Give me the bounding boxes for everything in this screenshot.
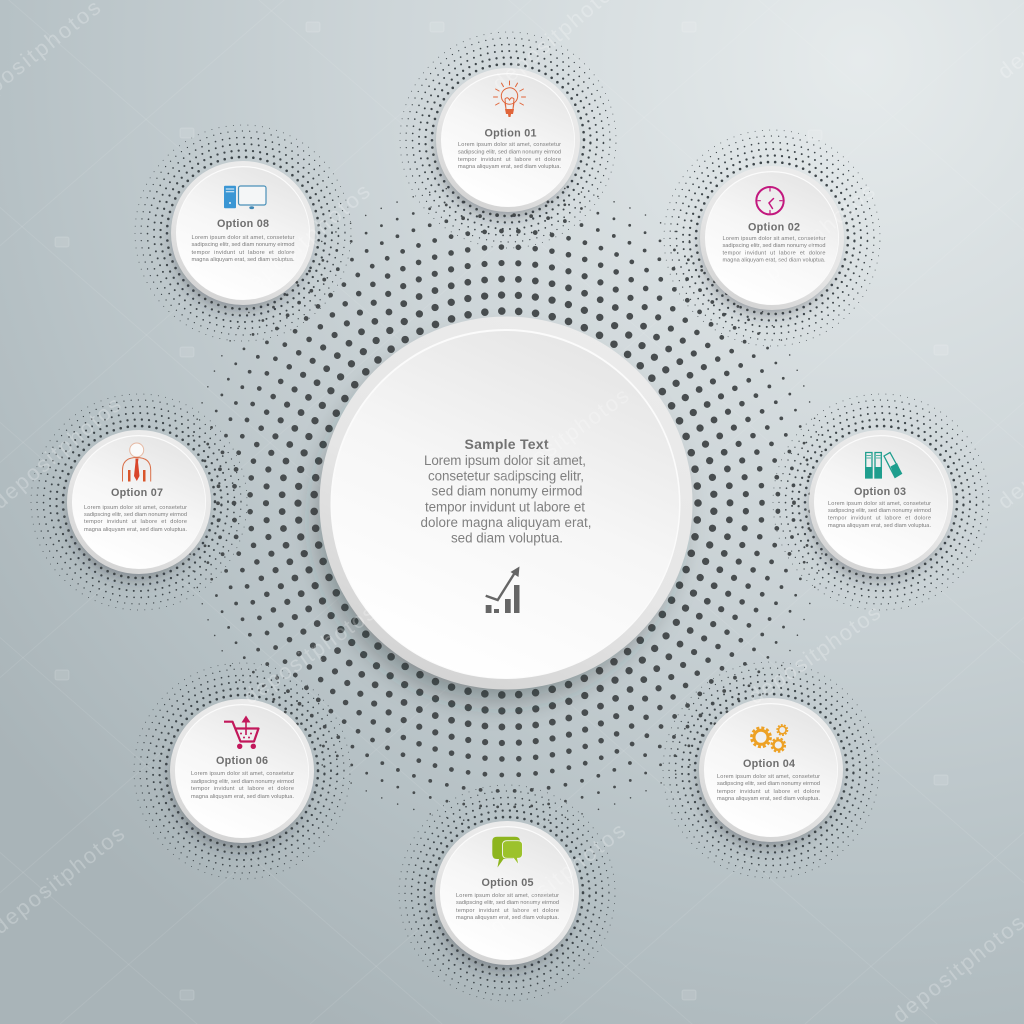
central title: Sample Text bbox=[464, 436, 549, 452]
central shadow bbox=[318, 340, 678, 700]
disc 04 bbox=[699, 698, 843, 847]
text block 04: tempor invidunt ut labore et dolore bbox=[717, 789, 820, 795]
central text block: Lorem ipsum dolor sit amet, bbox=[424, 453, 586, 468]
central disc outer ring bbox=[320, 316, 692, 690]
text block 07: tempor invidunt ut labore et dolore bbox=[84, 519, 187, 525]
title: Option 08: Option 08 bbox=[217, 218, 269, 230]
disc 05 bbox=[435, 821, 579, 970]
halftone 01 bbox=[397, 29, 619, 251]
disc 08 bbox=[171, 161, 315, 310]
text block 04: sadipscing elitr, sed diam nonumy eirmod bbox=[717, 781, 820, 787]
text block 08: magna aliquyam erat, sed diam voluptua. bbox=[192, 257, 295, 263]
text block 03: magna aliquyam erat, sed diam voluptua. bbox=[828, 523, 931, 529]
central disc inner bbox=[330, 329, 680, 679]
title: Option 06: Option 06 bbox=[216, 755, 268, 767]
text block 03: tempor invidunt ut labore et dolore bbox=[828, 516, 931, 522]
text block 06: Lorem ipsum dolor sit amet, consetetur bbox=[191, 771, 294, 777]
central text block: dolore magna aliquyam erat, bbox=[420, 515, 592, 530]
halftone 02 bbox=[661, 127, 883, 349]
panel: option 04 bbox=[660, 659, 882, 881]
text block 03 bbox=[828, 501, 931, 529]
text block 02: magna aliquyam erat, sed diam voluptua. bbox=[722, 258, 826, 264]
watermark text: depositphotos bbox=[737, 179, 880, 304]
text block 06 bbox=[191, 771, 294, 800]
text block 08: sadipscing elitr, sed diam nonumy eirmod bbox=[192, 242, 294, 248]
icon: shopping cart bbox=[224, 716, 258, 749]
text block 04: magna aliquyam erat, sed diam voluptua. bbox=[717, 796, 820, 802]
central halftone dot ring bbox=[186, 183, 826, 823]
icon: gears bbox=[751, 725, 788, 752]
central text block: consetetur sadipscing elitr, bbox=[428, 468, 584, 484]
text block 06: magna aliquyam erat, sed diam voluptua. bbox=[191, 794, 294, 800]
disc 01 bbox=[436, 68, 580, 217]
title: Option 01: Option 01 bbox=[484, 128, 536, 140]
panel: option 08 bbox=[132, 122, 354, 344]
disc 03 bbox=[809, 430, 953, 579]
text block 07: Lorem ipsum dolor sit amet, consetetur bbox=[84, 505, 187, 511]
title: Option 07: Option 07 bbox=[111, 487, 163, 499]
watermark text: depositphotos bbox=[485, 818, 630, 939]
title: Option 02: Option 02 bbox=[748, 222, 800, 234]
central text block: sed diam nonumy eirmod bbox=[432, 484, 582, 498]
halftone 04 bbox=[660, 659, 882, 881]
title: Option 03: Option 03 bbox=[854, 486, 906, 498]
text block 05 bbox=[456, 893, 559, 921]
text block 07: sadipscing elitr, sed diam nonumy eirmod bbox=[84, 512, 187, 518]
title: Option 04: Option 04 bbox=[743, 758, 795, 770]
panel: option 03 bbox=[770, 391, 992, 613]
watermark text: depositphotos bbox=[744, 600, 885, 709]
panel: option 02 bbox=[661, 127, 883, 349]
text block 01: sadipscing elitr, sed diam nonumy eirmod bbox=[458, 150, 561, 156]
text block 05: Lorem ipsum dolor sit amet, consetetur bbox=[456, 893, 559, 899]
text block 07 bbox=[84, 505, 187, 533]
watermark text: depositphotos bbox=[239, 600, 380, 709]
text block 01: magna aliquyam erat, sed diam voluptua. bbox=[458, 164, 561, 170]
text block 03: Lorem ipsum dolor sit amet, consetetur bbox=[828, 501, 931, 507]
icon: computer bbox=[224, 186, 266, 209]
icon: growth chart bbox=[486, 566, 520, 613]
disc 02 bbox=[700, 166, 844, 315]
icon: clock bbox=[756, 187, 784, 214]
text block 02: tempor invidunt ut labore et dolore bbox=[722, 250, 826, 256]
watermark text: depositphotos bbox=[232, 179, 375, 304]
halftone 08 bbox=[132, 122, 354, 344]
text block 08 bbox=[192, 235, 295, 263]
disc 07 bbox=[67, 430, 211, 579]
text block 03: sadipscing elitr, sed diam nonumy eirmod bbox=[828, 508, 931, 514]
panel: option 01 bbox=[397, 29, 619, 251]
halftone 07 bbox=[28, 391, 250, 613]
watermark text: depositphotos bbox=[493, 383, 633, 494]
text block 01: tempor invidunt ut labore et dolore bbox=[458, 157, 561, 163]
title: Option 05: Option 05 bbox=[482, 877, 534, 889]
panel: central circle bbox=[318, 316, 692, 700]
panel: option 07 bbox=[28, 391, 250, 613]
icon: light bulb bbox=[494, 81, 526, 117]
icon: binders bbox=[865, 452, 902, 478]
panel: option 05 bbox=[396, 782, 618, 1004]
central text block: tempor invidunt ut labore et bbox=[425, 500, 585, 514]
disc 06 bbox=[170, 699, 314, 848]
central text block bbox=[420, 453, 592, 546]
central text block: sed diam voluptua. bbox=[451, 530, 563, 546]
text block 05: magna aliquyam erat, sed diam voluptua. bbox=[456, 915, 559, 921]
text block 05: sadipscing elitr, sed diam nonumy eirmod bbox=[456, 900, 559, 906]
halftone 06 bbox=[131, 660, 353, 882]
text block 04 bbox=[717, 774, 820, 802]
text block 07: magna aliquyam erat, sed diam voluptua. bbox=[84, 527, 187, 533]
text block 06: tempor invidunt ut labore et dolore bbox=[191, 786, 294, 792]
panel: option 06 bbox=[131, 660, 353, 882]
text block 06: sadipscing elitr, sed diam nonumy eirmod bbox=[191, 779, 294, 785]
halftone 05 bbox=[396, 782, 618, 1004]
text block 02: sadipscing elitr, sed diam nonumy eirmod bbox=[722, 243, 826, 249]
text block 04: Lorem ipsum dolor sit amet, consetetur bbox=[717, 774, 820, 780]
text block 05: tempor invidunt ut labore et dolore bbox=[456, 908, 559, 914]
text block 02 bbox=[722, 236, 826, 264]
icon: speech bubbles bbox=[492, 837, 522, 868]
text block 02: Lorem ipsum dolor sit amet, consetetur bbox=[722, 236, 826, 242]
text block 01 bbox=[458, 142, 561, 170]
icon: business person bbox=[122, 443, 151, 482]
text block 08: tempor invidunt ut labore et dolore bbox=[192, 250, 294, 256]
halftone 03 bbox=[770, 391, 992, 613]
text block 01: Lorem ipsum dolor sit amet, consetetur bbox=[458, 142, 561, 148]
text block 08: Lorem ipsum dolor sit amet, consetetur bbox=[192, 235, 295, 241]
